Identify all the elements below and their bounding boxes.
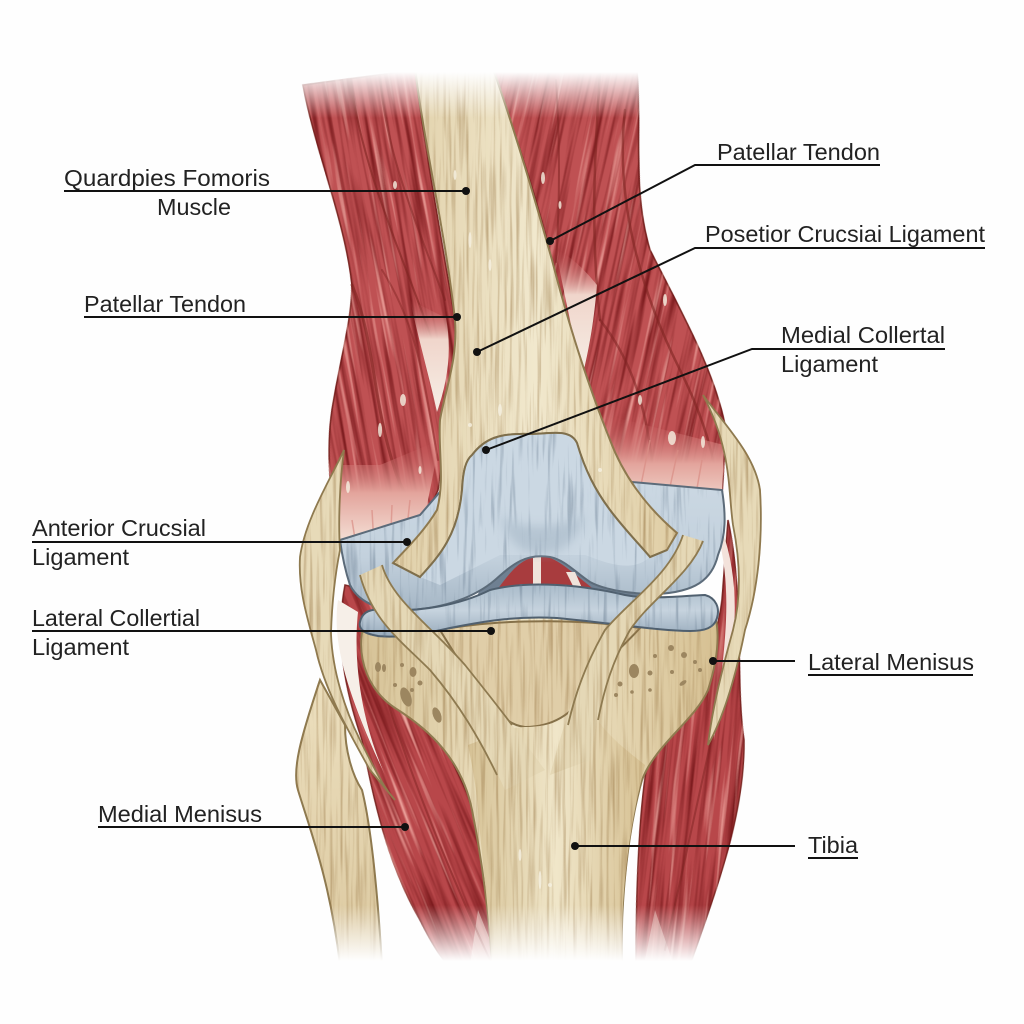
right crossing ligament [550, 535, 703, 775]
label: Quadriceps Femoris Muscle: Quardpies Fomoris [64, 165, 270, 191]
label: Patellar Tendon left: Patellar Tendon [84, 291, 246, 317]
notch backing behind cartilage [470, 555, 680, 610]
label: Lateral Meniscus: Lateral Menisus [808, 649, 974, 675]
white muscle-tendon transitions [338, 250, 724, 572]
label: Tibia: Tibia [808, 832, 858, 858]
label: Patellar Tendon left [84, 291, 461, 321]
upper right quadriceps muscle [393, 12, 823, 585]
muscle bundle shading [350, 72, 720, 960]
label: Lateral Collateral Ligament: Ligament [32, 634, 130, 660]
fibula [296, 680, 382, 965]
right outer ligament [703, 395, 761, 745]
label: Lateral Collateral Ligament: Lateral Collertial [32, 605, 200, 631]
pale specks [346, 170, 705, 889]
white tendon strips at the joint sides [337, 530, 735, 965]
upper left quadriceps muscle [217, 44, 541, 598]
label: Quadriceps Femoris Muscle [64, 165, 470, 220]
label: Anterior Cruciate Ligament: Ligament [32, 544, 130, 570]
bottom fade [320, 905, 720, 985]
label: Quadriceps Femoris Muscle: Muscle [157, 194, 231, 220]
label: Anterior Cruciate Ligament: Anterior Crucsial [32, 515, 206, 541]
label: Patellar Tendon right: Patellar Tendon [717, 139, 880, 165]
lower right calf muscle [590, 509, 790, 976]
label: Anterior Cruciate Ligament [32, 515, 411, 570]
right crossing ligament edges [568, 535, 703, 725]
knee anatomy illustration [205, 12, 823, 1024]
trochlear edge outline [393, 433, 667, 577]
label: Medial Collateral Ligament: Medial Collertal [781, 322, 945, 348]
left outer ligament [300, 450, 395, 800]
top fade [280, 30, 660, 140]
quadriceps tendon and condylar straps [393, 60, 677, 577]
tibia [361, 605, 718, 968]
bone pits on tibia head [375, 645, 702, 724]
label: Medial Collateral Ligament [482, 322, 945, 454]
cartilage notch shadow [500, 515, 585, 554]
label: Posterior Cruciate Ligament: Posetior Crucsiai Ligament [705, 221, 986, 247]
left crossing ligament [360, 565, 545, 790]
label: Medial Meniscus: Medial Menisus [98, 801, 262, 827]
lower left calf muscle [205, 526, 649, 1024]
label: Posterior Cruciate Ligament [473, 221, 986, 356]
label: Medial Collateral Ligament: Ligament [781, 351, 879, 377]
label: Lateral Meniscus [709, 649, 974, 675]
left crossing ligament edges [360, 565, 512, 775]
label: Lateral Collateral Ligament [32, 605, 495, 660]
trochlear cartilage top [420, 433, 650, 585]
label: Tibia [571, 832, 858, 858]
label: Patellar Tendon right [546, 139, 880, 245]
tibia plateau centre [440, 621, 640, 727]
tibia shaft merge [468, 705, 645, 968]
femoral cartilage (blue) [340, 433, 725, 610]
label: Medial Meniscus [98, 801, 409, 831]
meniscus [360, 585, 718, 637]
